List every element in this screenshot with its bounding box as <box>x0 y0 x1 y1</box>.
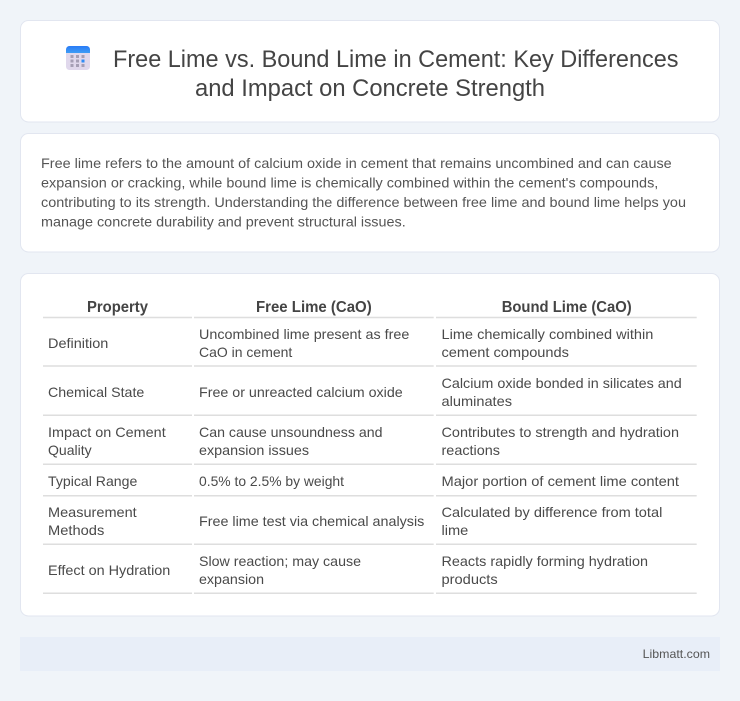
table header: Free Lime (CaO) <box>256 299 372 316</box>
panel: comparison table <box>20 274 720 616</box>
row: impact on cement quality: Contributes to strength and hydration <box>442 424 679 440</box>
row: impact on cement quality: Impact on Cement <box>48 424 166 440</box>
row: definition: Uncombined lime present as free <box>199 326 410 342</box>
row: effect on hydration <box>48 553 648 587</box>
row: effect on hydration: Slow reaction; may cause <box>199 553 361 569</box>
row: typical range: Major portion of cement lime content <box>442 473 679 489</box>
row: measurement methods: Measurement <box>48 504 137 520</box>
row: chemical state: Free or unreacted calcium oxide <box>199 384 403 400</box>
row: measurement methods: Free lime test via chemical analysis <box>199 513 424 529</box>
icon: calendar <box>66 46 90 70</box>
row: definition: Lime chemically combined within <box>442 326 653 342</box>
panel: description: Free lime refers to the amount of calcium oxide in cement that remains uncombined and can cause <box>41 155 672 171</box>
row: effect on hydration: Effect on Hydration <box>48 562 170 578</box>
panel: description: manage concrete durability and prevent structural issues. <box>41 214 406 230</box>
table header <box>87 299 632 316</box>
title: Free Lime vs. Bound Lime in Cement: Key Differences <box>113 46 678 73</box>
row: chemical state: Chemical State <box>48 384 145 400</box>
row: effect on hydration: products <box>442 571 498 587</box>
row: typical range <box>48 473 679 489</box>
row: chemical state: aluminates <box>442 393 512 409</box>
row: measurement methods: Calculated by difference from total <box>442 504 662 520</box>
table header: Bound Lime (CaO) <box>502 299 632 316</box>
row: definition: cement compounds <box>442 344 569 360</box>
row: effect on hydration: expansion <box>199 571 264 587</box>
title <box>113 46 678 102</box>
row: impact on cement quality: Can cause unsoundness and <box>199 424 382 440</box>
row: measurement methods: Methods <box>48 522 104 538</box>
row: measurement methods <box>48 504 662 538</box>
footer bar <box>20 637 720 671</box>
row: typical range: 0.5% to 2.5% by weight <box>199 473 344 489</box>
row: impact on cement quality: reactions <box>442 442 500 458</box>
row: chemical state <box>48 375 682 409</box>
footer bar: Libmatt.com <box>643 647 710 661</box>
panel: description: expansion or cracking, while bound lime is chemically combined within the cement's compounds, <box>41 174 658 190</box>
row: definition <box>48 326 653 360</box>
panel: description: contributing to its strength. Understanding the difference between free lime and bound lime helps you <box>41 194 686 210</box>
row: impact on cement quality: expansion issues <box>199 442 309 458</box>
row: impact on cement quality <box>48 424 679 458</box>
table header: Property <box>87 299 148 316</box>
panel: title header <box>20 20 720 122</box>
row: definition: Definition <box>48 335 108 351</box>
panel: description <box>20 134 720 252</box>
row: effect on hydration: Reacts rapidly forming hydration <box>442 553 648 569</box>
row: measurement methods: lime <box>442 522 469 538</box>
row: typical range: Typical Range <box>48 473 138 489</box>
row: chemical state: Calcium oxide bonded in silicates and <box>442 375 682 391</box>
row: definition: CaO in cement <box>199 344 292 360</box>
row: impact on cement quality: Quality <box>48 442 92 458</box>
title: and Impact on Concrete Strength <box>195 75 545 102</box>
